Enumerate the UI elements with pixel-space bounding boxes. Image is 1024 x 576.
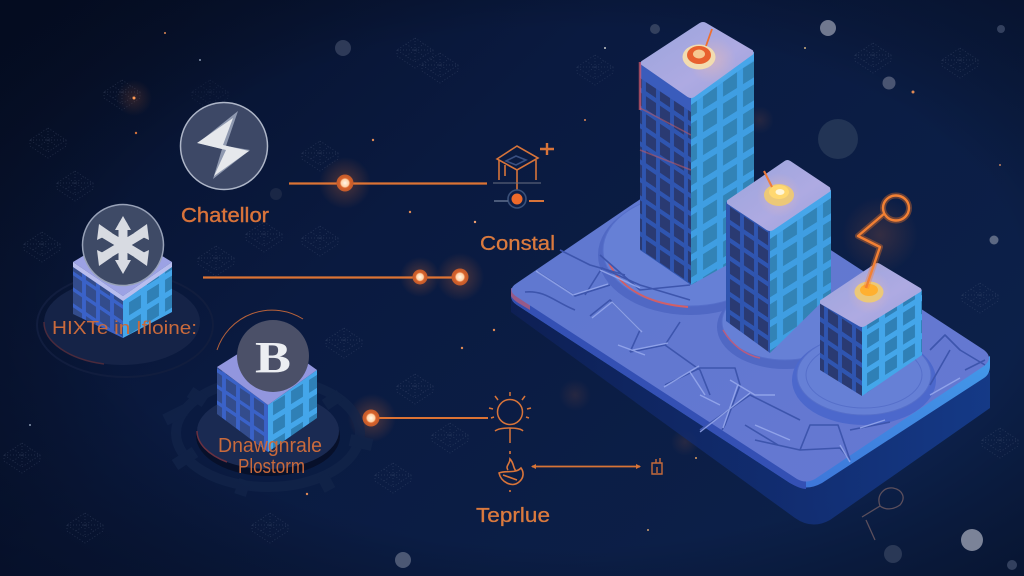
icon: sun bulb (489, 392, 531, 443)
beacon coin (682, 29, 736, 84)
icon: B badge: B (255, 333, 291, 382)
icon: snowflake badge (82, 204, 164, 286)
tower: short (820, 196, 922, 396)
tower base discs (598, 194, 936, 425)
label: HIXTe in Ifloine: HIXTe in Ifloine: (52, 318, 197, 338)
building node: snowflake (37, 204, 213, 377)
platform top (512, 165, 989, 482)
label: Chatellor: Chatellor (181, 205, 269, 227)
icon: constal pavilion (493, 143, 554, 208)
label: Constal: Constal (480, 233, 555, 255)
small building (73, 232, 172, 338)
icon: small box (652, 458, 662, 474)
label: Teprlue: Teprlue (476, 505, 550, 527)
icon: flame bowl (499, 451, 523, 492)
surface cracks (525, 250, 985, 460)
base disc (196, 393, 340, 476)
small building (217, 335, 317, 452)
connector: middle line (203, 253, 484, 301)
gear backdrop (165, 379, 372, 495)
label: Dnawgnrale Plostorm: Dnawgnrale (218, 435, 322, 457)
background bubbles (270, 20, 1017, 570)
connector: bottom arrow (531, 464, 641, 469)
icon: faint stethoscope outline (862, 488, 903, 540)
label: Dnawgnrale Plostorm (218, 435, 322, 478)
connector: upper line (289, 157, 487, 209)
icon: B badge (237, 320, 309, 392)
tower: middle (726, 161, 831, 353)
platform reflection (511, 300, 990, 525)
platform side (511, 288, 990, 488)
building node: letter B (165, 310, 372, 495)
glowing rune and coin (842, 196, 918, 314)
icon: lightning badge (180, 102, 268, 190)
orange arc (217, 310, 303, 350)
tower: tall (640, 23, 754, 285)
connector: lower line (348, 394, 488, 442)
label: Dnawgnrale Plostorm: Plostorm (238, 456, 305, 478)
platform (511, 165, 990, 489)
base disc (37, 273, 213, 377)
beacon coin (757, 171, 801, 217)
